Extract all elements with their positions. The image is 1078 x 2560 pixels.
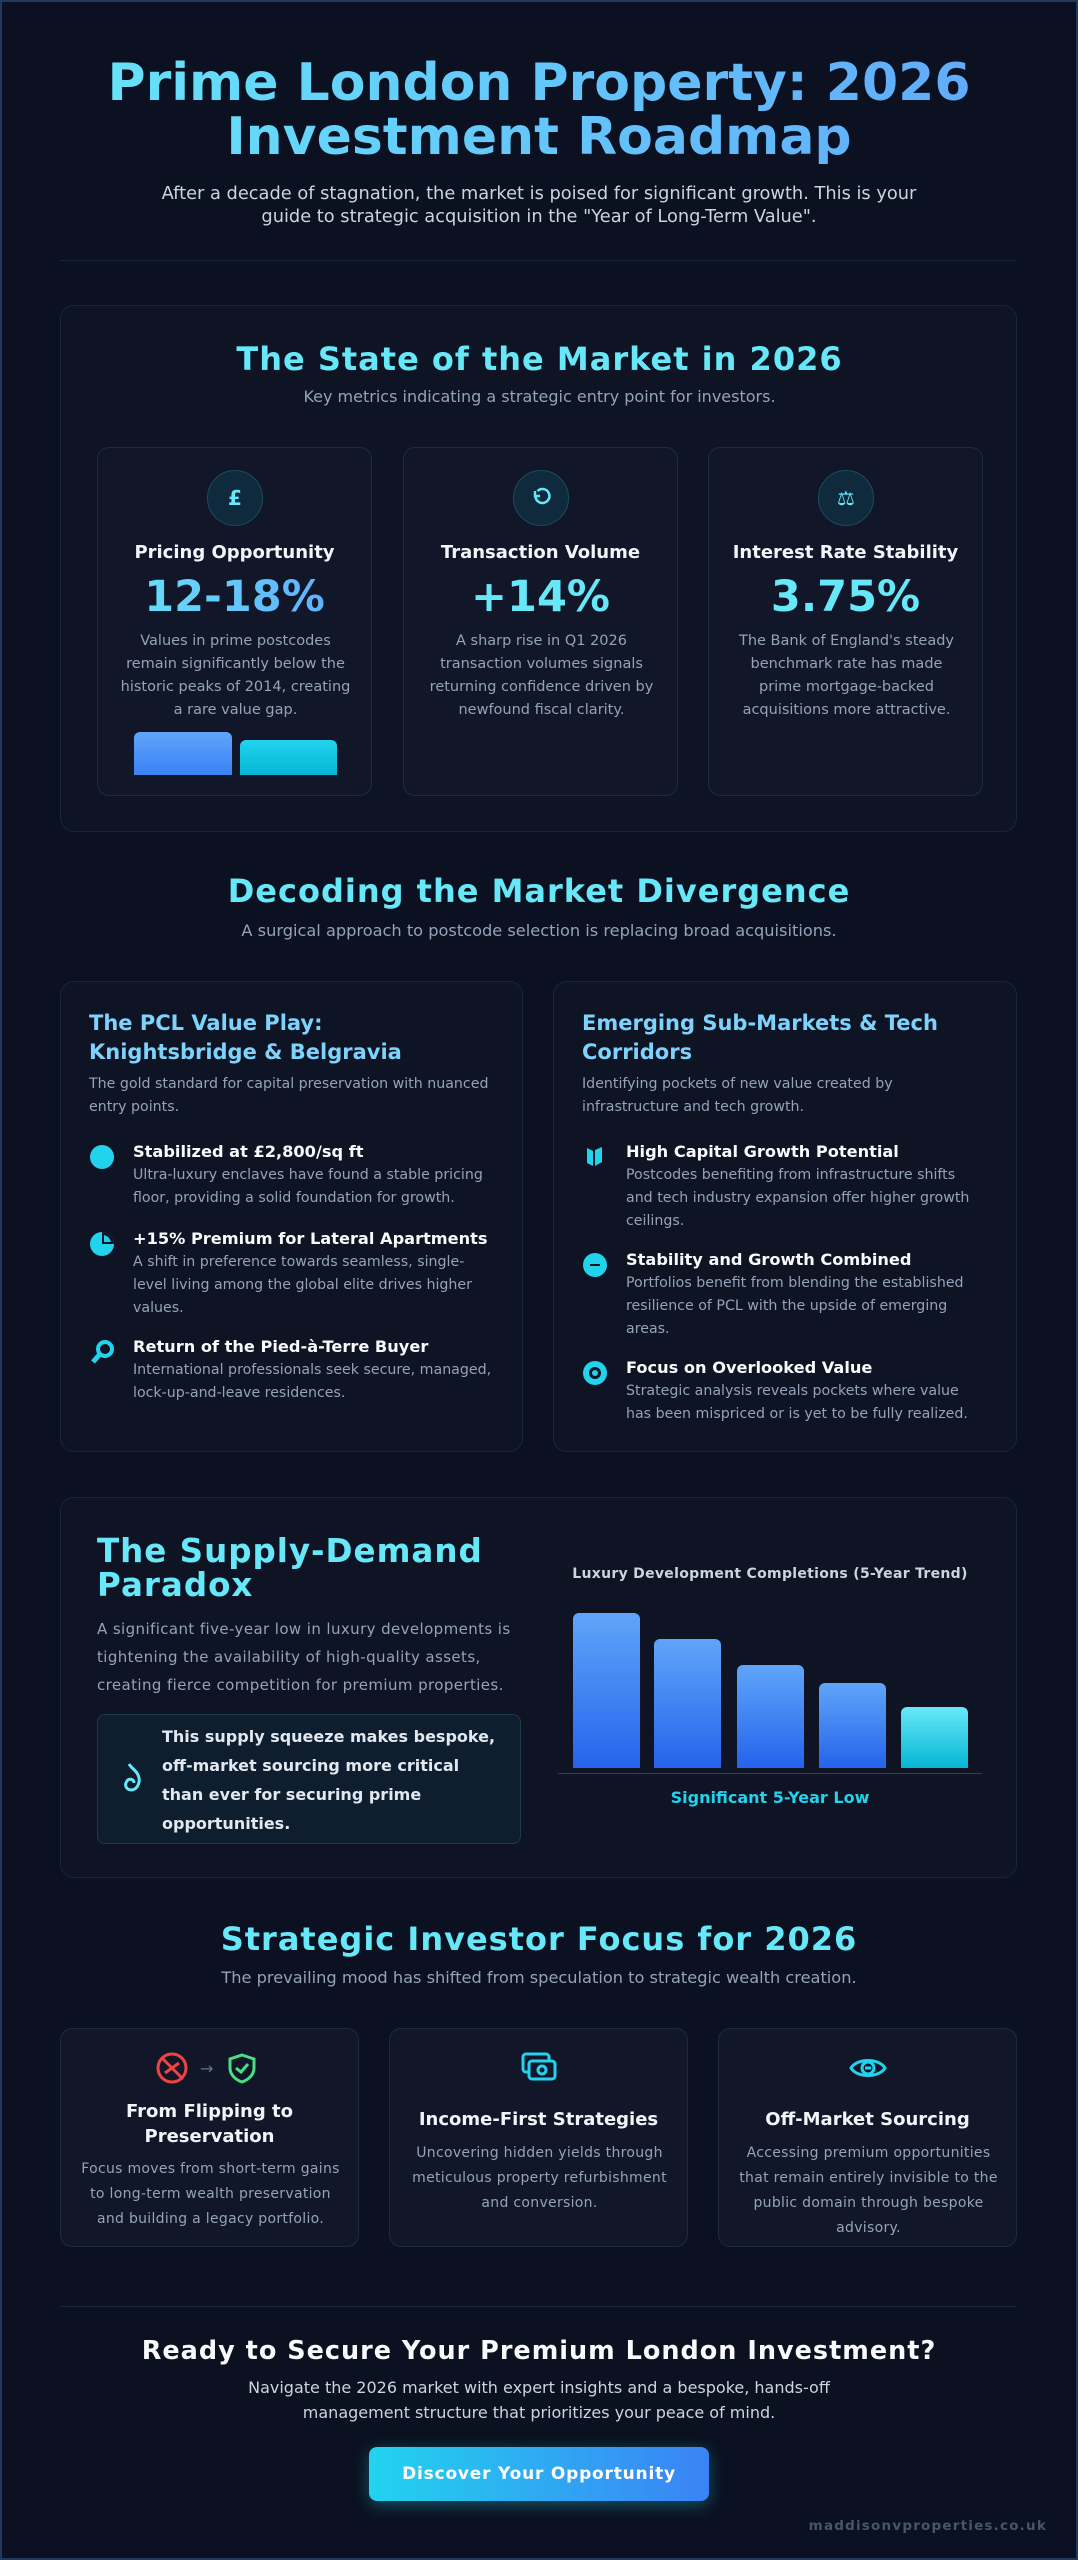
icon: cash: [522, 2052, 556, 2080]
CTA button: [369, 2447, 709, 2501]
label: Interest Rate Stability: [733, 542, 958, 563]
item: pied-a-terre: [91, 1337, 491, 1401]
card heading: Knightsbridge & Belgravia: [89, 1040, 402, 1064]
card: income-first: [389, 2028, 688, 2247]
footer brand: maddisonvproperties.co.uk: [809, 2518, 1047, 2534]
CTA text: Navigate the 2026 market with expert insights and a bespoke, hands-off management structure that prioritizes your peace of mind.: [248, 2378, 830, 2422]
description: Uncovering hidden yields through meticulous property refurbishment and conversion.: [412, 2145, 667, 2211]
card: flipping to preservation: [60, 2028, 359, 2247]
panel: emerging sub-markets: Postcodes benefiting from infrastructure shifts and tech industry expansion offer higher growth ceilings.: [626, 1167, 969, 1229]
panel: emerging sub-markets: High Capital Growth Potential: [626, 1142, 899, 1161]
intro text: guide to strategic acquisition in the "Year of Long-Term Value".: [261, 206, 817, 227]
panel: PCL value play: A shift in preference towards seamless, single-level living among the global elite drives higher values.: [133, 1254, 472, 1316]
panel: PCL value play: International professionals seek secure, managed, lock-up-and-leave residences.: [133, 1362, 491, 1401]
subheading: investor focus: The prevailing mood has shifted from speculation to strategic wealth creation.: [221, 1968, 857, 1987]
title: [0, 56, 1078, 164]
item: growth: [587, 1142, 969, 1229]
subheading: Key metrics indicating a strategic entry point for investors.: [303, 387, 776, 406]
icon: no-flip to shield: [156, 2052, 256, 2084]
label: Transaction Volume: [441, 542, 640, 563]
callout: [97, 1714, 521, 1844]
description: Accessing premium opportunities that remain entirely invisible to the public domain through bespoke advisory.: [739, 2145, 998, 2236]
panel: emerging sub-markets: Portfolios benefit from blending the established resilience of PCL with the upside of emerging areas.: [626, 1275, 964, 1337]
number: +14%: [471, 572, 610, 622]
panel: PCL value play: +15% Premium for Lateral Apartments: [133, 1229, 488, 1248]
icon: hand: [124, 1763, 141, 1792]
panel: emerging sub-markets: Stability and Growth Combined: [626, 1250, 912, 1269]
panel: PCL value play: Stabilized at £2,800/sq ft: [133, 1142, 364, 1161]
panel: PCL value play: Ultra-luxury enclaves have found a stable pricing floor, providing a solid foundation for growth.: [133, 1167, 483, 1206]
heading: divergence: Decoding the Market Divergence: [228, 872, 850, 910]
paragraph: A significant five-year low in luxury developments is tightening the availability of high-quality assets, creating fierce competition for premium properties.: [97, 1620, 511, 1694]
card: interest: [708, 447, 983, 796]
number: [98, 572, 371, 622]
card: pricing: [97, 447, 372, 796]
icon: pound: £: [228, 486, 242, 510]
panel: emerging sub-markets: [553, 981, 1017, 1452]
panel: PCL value play: Return of the Pied-à-Terre Buyer: [133, 1337, 428, 1356]
intro text: After a decade of stagnation, the market is poised for significant growth. This is your: [162, 183, 916, 204]
panel: emerging sub-markets: Focus on Overlooked Value: [626, 1358, 872, 1377]
callout text: This supply squeeze makes bespoke, off-market sourcing more critical than ever for securing prime opportunities.: [162, 1727, 495, 1833]
panel: PCL value play: [60, 981, 523, 1452]
heading: investor focus: Strategic Investor Focus for 2026: [221, 1920, 857, 1958]
bar chart: [558, 1566, 982, 1807]
heading: supply-demand: The Supply-Demand: [97, 1532, 483, 1570]
item: stabilized: [90, 1142, 483, 1206]
icon: scales: ⚖: [837, 486, 855, 510]
number: 12-18%: [144, 572, 325, 622]
title: Investment Roadmap: [226, 107, 852, 167]
icon: scales: [818, 470, 874, 526]
item: overlooked: [583, 1358, 968, 1422]
CTA button: Discover Your Opportunity: [402, 2464, 676, 2484]
title: Income-First Strategies: [419, 2109, 658, 2130]
card: volume: [403, 447, 678, 796]
number: 3.75%: [771, 572, 920, 622]
icon: pound: [207, 470, 263, 526]
chart title: Luxury Development Completions (5-Year Trend): [572, 1566, 968, 1582]
panel: supply-demand: [60, 1497, 1017, 1878]
title: Prime London Property: 2026: [107, 53, 971, 113]
subheading: divergence: A surgical approach to postcode selection is replacing broad acquisitions.: [241, 921, 837, 940]
description: Focus moves from short-term gains to long-term wealth preservation and building a legacy portfolio.: [81, 2161, 340, 2227]
card heading: Emerging Sub-Markets & Tech Corridors: [582, 1011, 938, 1064]
card heading: [89, 1011, 402, 1064]
label: Pricing Opportunity: [134, 542, 335, 563]
description: A sharp rise in Q1 2026 transaction volumes signals returning confidence driven by newfound fiscal clarity.: [430, 633, 653, 718]
card heading: The PCL Value Play:: [89, 1011, 323, 1035]
chart label: Significant 5-Year Low: [671, 1788, 869, 1807]
title: Off-Market Sourcing: [765, 2109, 970, 2130]
panel: emerging sub-markets: Strategic analysis reveals pockets where value has been mispriced or is yet to be fully realized.: [626, 1383, 968, 1422]
card intro: The gold standard for capital preservation with nuanced entry points.: [89, 1076, 488, 1115]
card: off-market: [718, 2028, 1017, 2247]
panel: state of market: [60, 305, 1017, 832]
CTA heading: Ready to Secure Your Premium London Investment?: [142, 2336, 936, 2366]
item: premium: [90, 1229, 488, 1316]
heading: state of market: The State of the Market in 2026: [236, 340, 843, 378]
title: From Flipping to: [126, 2101, 293, 2122]
icon: refresh: [513, 470, 569, 526]
description: The Bank of England's steady benchmark rate has made prime mortgage-backed acquisitions more attractive.: [739, 633, 954, 718]
icon: eye: [849, 2059, 887, 2077]
mini bar chart: [134, 732, 337, 775]
title: [126, 2101, 293, 2147]
heading: supply-demand: [97, 1532, 483, 1604]
intro text: [162, 183, 916, 227]
description: Values in prime postcodes remain significantly below the historic peaks of 2014, creating a rare value gap.: [121, 633, 350, 718]
icon: no-flip to shield: →: [200, 2059, 213, 2078]
heading: supply-demand: Paradox: [97, 1566, 253, 1604]
card intro: Identifying pockets of new value created by infrastructure and tech growth.: [582, 1076, 893, 1115]
item: stability: [583, 1250, 964, 1337]
title: Preservation: [145, 2126, 274, 2147]
